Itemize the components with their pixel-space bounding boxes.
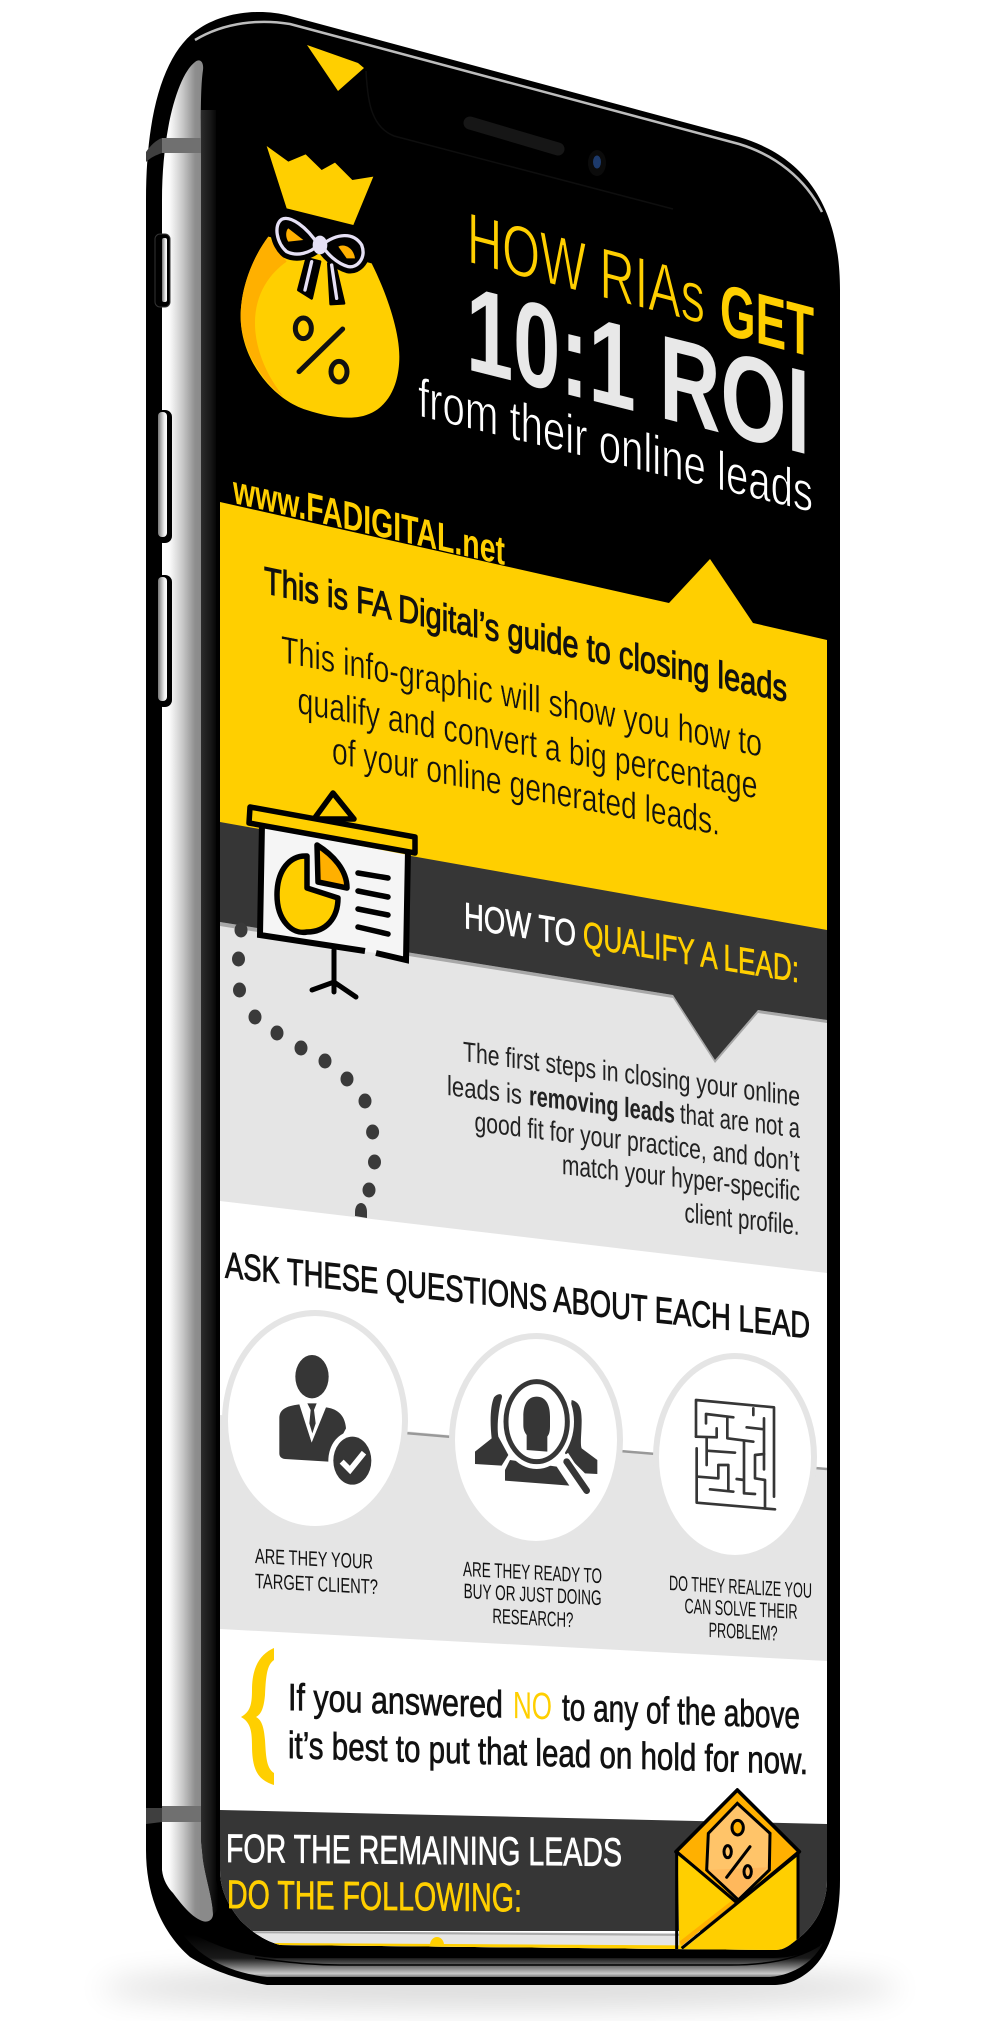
icon: magnifier over people	[475, 1374, 597, 1492]
label 2	[463, 1558, 602, 1632]
pie chart	[277, 856, 338, 932]
intro paragraph: removing leads	[447, 1036, 800, 1241]
phone mockup	[146, 12, 840, 1985]
panel: yellow intro	[220, 502, 827, 932]
label 3: CAN SOLVE THEIR	[684, 1595, 798, 1624]
intro body text: qualify and convert a big percentage	[298, 679, 758, 807]
phone body	[146, 12, 840, 1985]
antenna stripes	[146, 138, 201, 1824]
title	[418, 197, 814, 524]
bow	[277, 218, 363, 304]
yellow corner triangle	[307, 45, 364, 91]
panel: grey question strip	[220, 1415, 827, 1661]
section heading: remaining leads: FOR THE REMAINING LEADS	[226, 1827, 622, 1875]
section heading: remaining leads: DO THE FOLLOWING:	[227, 1873, 522, 1921]
callout text: NO	[513, 1685, 552, 1728]
panel: dark band remaining	[220, 1810, 827, 1960]
intro paragraph: removing leads: removing leads	[529, 1080, 675, 1129]
callout text	[288, 1677, 808, 1783]
notch outline	[366, 71, 673, 209]
intro body text: of your online generated leads.	[332, 729, 720, 844]
intro body text	[281, 628, 762, 844]
speaker	[470, 123, 558, 149]
inner bezel sheen	[201, 110, 222, 1915]
icon: envelope with percent tag	[676, 1790, 799, 1951]
callout text: it’s best to put that lead on hold for now.	[288, 1725, 808, 1783]
question labels	[255, 1545, 812, 1646]
section heading: qualify: HOW TO	[464, 894, 576, 954]
label 3: DO THEY REALIZE YOU	[669, 1572, 812, 1603]
label 1: TARGET CLIENT?	[255, 1570, 378, 1599]
percent sign	[295, 318, 347, 382]
label 2: BUY OR JUST DOING	[464, 1580, 602, 1610]
intro paragraph: removing leads: that are not a	[680, 1098, 800, 1144]
panel: bottom strip	[252, 1931, 772, 1950]
callout text: to any of the above	[562, 1687, 800, 1737]
label 1	[255, 1545, 378, 1599]
section heading: qualify	[464, 894, 799, 990]
title line 1: HOW RIAs	[467, 197, 705, 340]
intro paragraph: removing leads: leads is	[447, 1070, 522, 1110]
circle 2: ready to buy	[452, 1336, 620, 1544]
title line 2: 10:1 ROI	[466, 261, 810, 481]
label 2: RESEARCH?	[492, 1605, 573, 1632]
title line 1: GET	[720, 268, 814, 373]
silver frame highlight	[195, 22, 822, 212]
icon: maze	[696, 1400, 775, 1509]
phone shadow	[100, 1968, 900, 2008]
camera	[588, 150, 606, 176]
panel: white lower background	[220, 1180, 827, 1960]
intro paragraph: removing leads: client profile.	[684, 1197, 800, 1241]
label 1: ARE THEY YOUR	[255, 1545, 373, 1574]
circle 1: target client	[225, 1313, 405, 1529]
heading: ask these questions: ASK THESE QUESTIONS ABOUT EACH LEAD	[225, 1244, 810, 1346]
intro body text: This info-graphic will show you how to	[281, 628, 762, 766]
intro paragraph: removing leads: good fit for your practice, and don’t	[474, 1106, 800, 1177]
website url: www.FADIGITAL.net	[232, 466, 505, 574]
dotted path	[232, 922, 381, 1218]
side buttons	[155, 234, 172, 707]
screen content	[220, 502, 827, 1960]
icon: money bag	[241, 146, 399, 418]
panel: dark band qualify	[220, 822, 827, 1063]
label 2: ARE THEY READY TO	[463, 1558, 602, 1588]
intro paragraph: removing leads: match your hyper-specific	[562, 1149, 800, 1207]
connector lines	[405, 1433, 827, 1469]
intro paragraph: removing leads: The first steps in closing your online	[463, 1036, 800, 1112]
section heading: remaining leads	[226, 1827, 622, 1921]
section heading: qualify: QUALIFY A LEAD:	[583, 913, 799, 990]
intro heading: This is FA Digital’s guide to closing leads	[264, 559, 787, 711]
silver side band	[162, 60, 213, 1922]
callout text: If you answered	[288, 1677, 503, 1727]
title line 3: from their online leads	[418, 366, 813, 524]
bottom bevel	[178, 1927, 823, 1977]
icon: person with check	[279, 1355, 376, 1490]
label 3	[669, 1572, 812, 1646]
icon: presentation board	[249, 793, 415, 997]
circle 3: realize you can solve	[656, 1356, 814, 1558]
label 3: PROBLEM?	[709, 1619, 778, 1646]
panel: grey intro	[220, 920, 827, 1273]
list lines	[358, 873, 388, 934]
icon: yellow brace	[241, 1648, 274, 1785]
